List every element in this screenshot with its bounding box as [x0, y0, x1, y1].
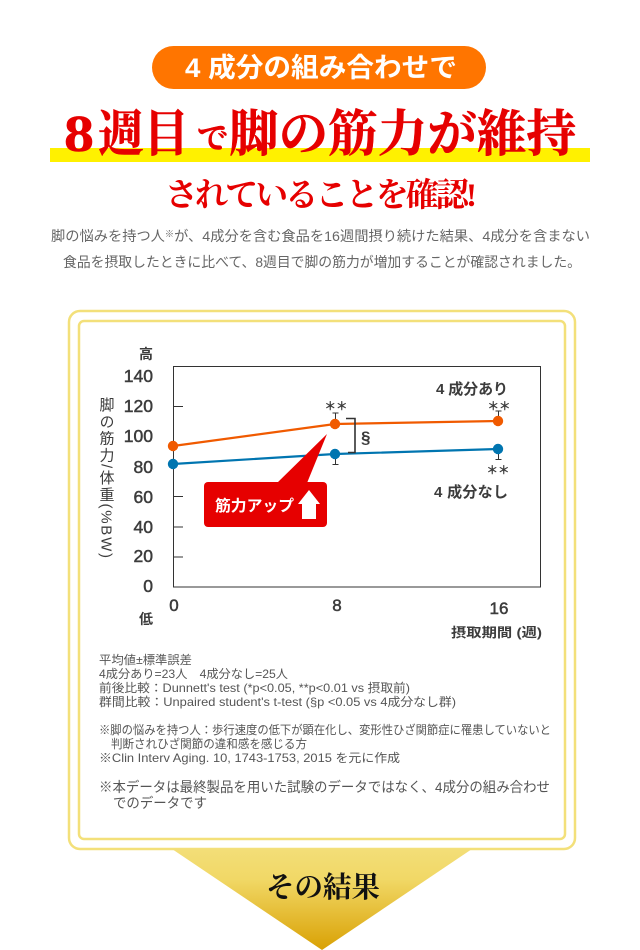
arrow: その結果 [172, 849, 472, 950]
y axis tick labels: 0 [143, 576, 153, 596]
line chart [98, 346, 542, 640]
icon: up arrow [298, 490, 320, 519]
title: 8週目で脚の筋力が維持 [50, 106, 590, 163]
disclaimer: でのデータです [113, 795, 207, 811]
significance bracket [346, 418, 370, 452]
study notes: 4成分あり=23人 4成分なし=25人 [99, 667, 288, 681]
y axis tick labels: 120 [124, 396, 153, 416]
panel: study results [69, 311, 575, 849]
study notes: 群間比較：Unpaired student's t-test (§p <0.05 vs 4成分なし群) [99, 695, 456, 709]
disclaimer: ※本データは最終製品を用いた試験のデータではなく、4成分の組み合わせ [99, 779, 550, 795]
y axis tick labels: 40 [134, 517, 153, 537]
asterisks: ＊＊ [324, 401, 348, 413]
y axis tick labels: 80 [134, 457, 153, 477]
intro text: が、4成分を含む食品を16週間摂り続けた結果、4成分を含まない [174, 228, 590, 244]
study notes: ※脚の悩みを持つ人：歩行速度の低下が顕在化し、変形性ひざ関節症に罹患していないと [99, 722, 551, 737]
study notes: 判断されひざ関節の違和感を感じる方 [111, 736, 307, 751]
x axis tick labels [169, 596, 508, 618]
x axis title: 摂取期間 (週) [451, 625, 542, 640]
error bars [332, 411, 502, 464]
study notes: ※Clin Interv Aging. 10, 1743-1753, 2015 を元に作成 [99, 751, 400, 765]
significance bracket: § [361, 428, 370, 447]
title: 8週目で脚の筋力が維持: 8 [64, 106, 94, 163]
x axis tick labels: 0 [169, 596, 179, 615]
study notes: 前後比較：Dunnett's test (*p<0.05, **p<0.01 vs 摂取前) [99, 680, 410, 695]
series: 4成分あり [168, 416, 503, 451]
series: 4成分なし [168, 444, 503, 469]
arrow: その結果: その結果 [266, 871, 380, 904]
intro text: 脚の悩みを持つ人 [51, 228, 163, 244]
y axis title: 脚の筋力/体重(%BW) [98, 397, 114, 558]
y axis tick labels: 140 [124, 366, 153, 386]
asterisks [324, 401, 510, 477]
badge: 4成分の組み合わせで: 4 成分の組み合わせで [185, 53, 457, 83]
title: 8週目で脚の筋力が維持: 脚の筋力が維持 [229, 106, 576, 162]
intro text [51, 228, 590, 270]
callout: 筋力アップ: 筋力アップ [215, 496, 294, 515]
intro text: ※ [165, 229, 174, 239]
disclaimer [99, 779, 550, 811]
title: 8週目で脚の筋力が維持: 週目 [98, 106, 189, 162]
subtitle: されていることを確認!: されていることを確認! [165, 177, 477, 214]
y axis end labels: 低 [139, 611, 153, 627]
study notes: 平均値±標準誤差 [99, 652, 192, 667]
badge: 4成分の組み合わせで [152, 46, 486, 89]
study notes [99, 652, 551, 765]
plot frame [174, 366, 540, 587]
callout: 筋力アップ [204, 434, 327, 527]
label: 4成分あり: 4 成分あり [436, 380, 508, 398]
asterisks: ＊＊ [486, 465, 510, 477]
intro text: 食品を摂取したときに比べて、8週目で脚の筋力が増加することが確認されました。 [63, 254, 581, 270]
x axis tick labels: 8 [332, 596, 342, 615]
y axis tick labels: 100 [124, 426, 153, 446]
label: 4成分なし: 4 成分なし [434, 483, 508, 501]
y axis end labels [139, 346, 153, 627]
y axis end labels: 高 [139, 346, 153, 362]
asterisks: ＊＊ [488, 401, 510, 413]
title: 8週目で脚の筋力が維持: で [197, 121, 228, 156]
y axis tick labels: 60 [134, 487, 153, 507]
y axis tick labels: 20 [134, 546, 153, 566]
x axis tick labels: 16 [490, 599, 508, 618]
y axis tick labels [124, 366, 153, 596]
